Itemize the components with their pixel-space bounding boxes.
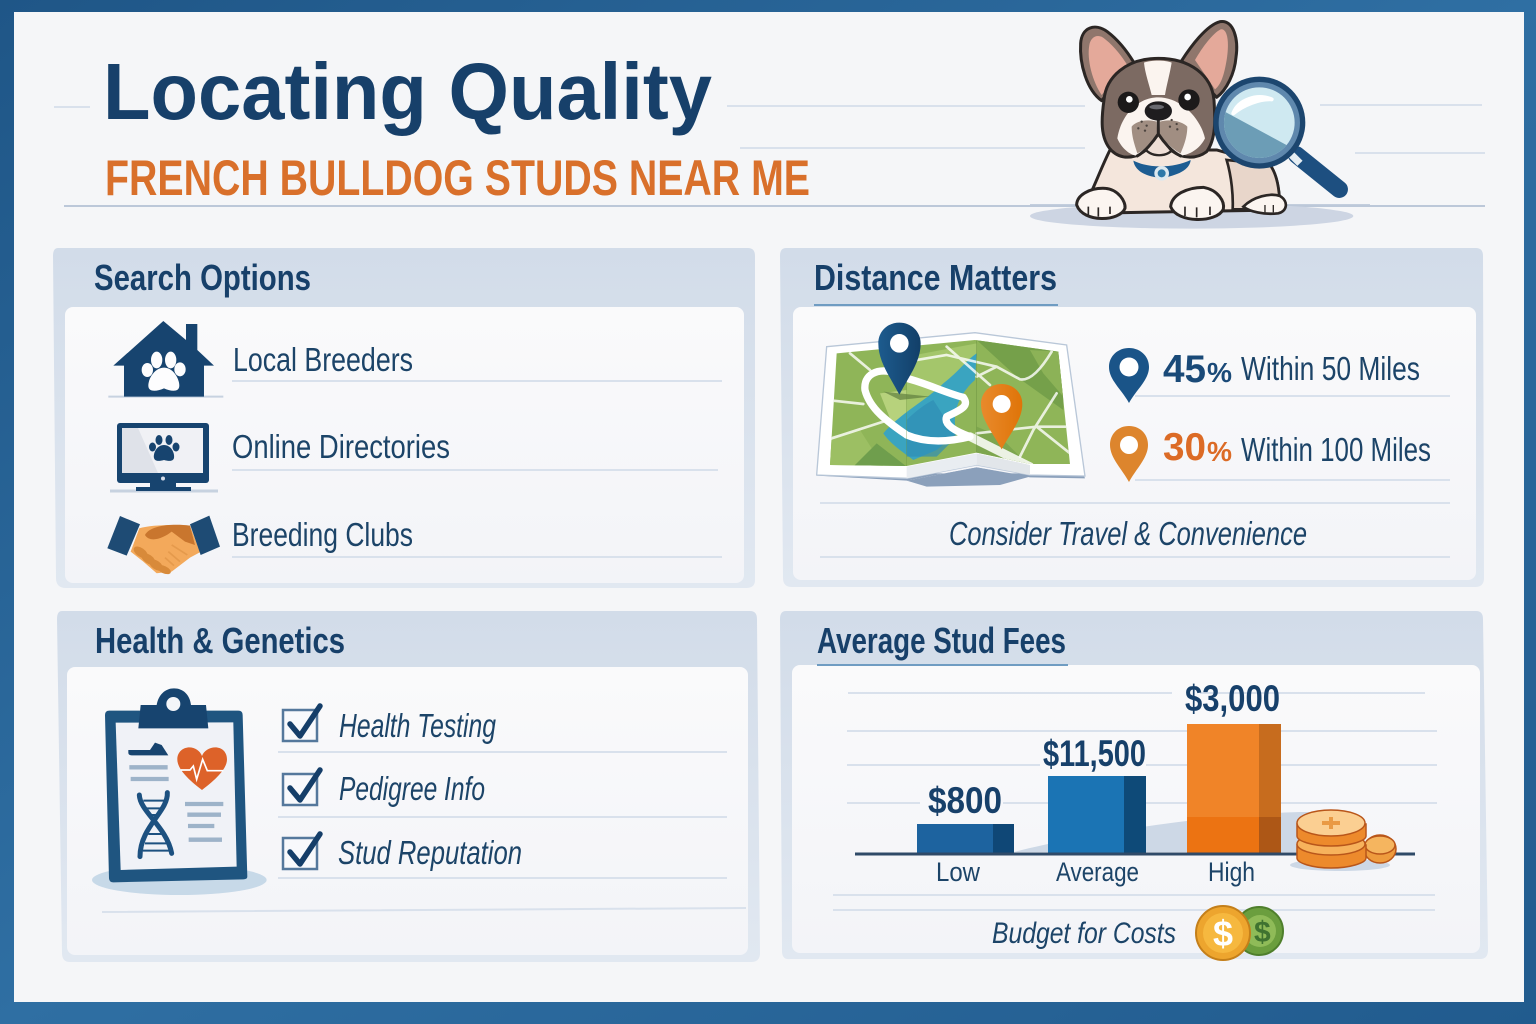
icon: dollar coins: $	[1254, 916, 1271, 949]
icon: computer monitor with paw	[110, 423, 218, 491]
icon: blue location pin	[1109, 348, 1149, 403]
checklist item: health testing: Health Testing	[339, 707, 496, 744]
value label: average: $11,500	[1043, 733, 1146, 774]
panel: health and genetics	[57, 611, 760, 962]
icon: dollar coins	[1196, 906, 1283, 960]
stat: 45 percent within 50 miles	[1163, 348, 1420, 391]
illustration: french bulldog with magnifying glass	[1030, 21, 1370, 229]
checklist item: health testing	[283, 706, 496, 744]
stat: 30 percent within 100 miles: 30	[1163, 426, 1206, 469]
heading: distance matters: Distance Matters	[814, 257, 1057, 298]
bar chart: stud fees	[855, 678, 1415, 887]
stat: 30 percent within 100 miles: %	[1207, 436, 1232, 467]
illustration: folded map with pins	[817, 323, 1085, 487]
checklist item: stud reputation	[283, 834, 522, 871]
axis label: average: Average	[1056, 857, 1139, 887]
illustration: clipboard with heart and DNA	[92, 688, 267, 895]
value label: low: $800	[928, 780, 1002, 821]
panel: average stud fees	[780, 611, 1488, 960]
header rules	[54, 105, 1485, 206]
checklist item: pedigree info: Pedigree Info	[339, 770, 485, 807]
stat: 30 percent within 100 miles	[1163, 426, 1431, 469]
text: budget for costs: Budget for Costs	[992, 917, 1176, 950]
checklist item: pedigree info	[283, 770, 485, 807]
panel: search options	[53, 248, 755, 588]
value label: high: $3,000	[1185, 678, 1280, 719]
icon: dollar coins: $	[1213, 913, 1233, 954]
axis label: low: Low	[936, 857, 980, 887]
panel: distance matters	[780, 248, 1484, 587]
title: Locating Quality	[103, 47, 712, 136]
stat: 45 percent within 50 miles: 45	[1163, 348, 1206, 391]
stat: 45 percent within 50 miles: %	[1207, 357, 1232, 388]
icon: orange location pin	[1110, 426, 1148, 482]
stat: 45 percent within 50 miles: Within 50 Miles	[1241, 350, 1420, 387]
text: consider travel and convenience: Consider Travel & Convenience	[949, 515, 1307, 552]
heading: health and genetics: Health & Genetics	[95, 620, 345, 661]
heading: search options: Search Options	[94, 257, 311, 298]
axis label: high: High	[1208, 857, 1255, 887]
text: breeding clubs: Breeding Clubs	[232, 516, 413, 553]
text: online directories: Online Directories	[232, 428, 450, 465]
subtitle: FRENCH BULLDOG STUDS NEAR ME	[105, 150, 810, 206]
checklist item: stud reputation: Stud Reputation	[338, 834, 522, 871]
heading: average stud fees: Average Stud Fees	[817, 620, 1066, 661]
icon: stacked coins	[1290, 810, 1396, 871]
icon: house with paw	[108, 321, 223, 397]
text: local breeders: Local Breeders	[233, 341, 413, 378]
stat: 30 percent within 100 miles: Within 100 Miles	[1241, 431, 1431, 468]
icon: handshake	[107, 516, 220, 576]
